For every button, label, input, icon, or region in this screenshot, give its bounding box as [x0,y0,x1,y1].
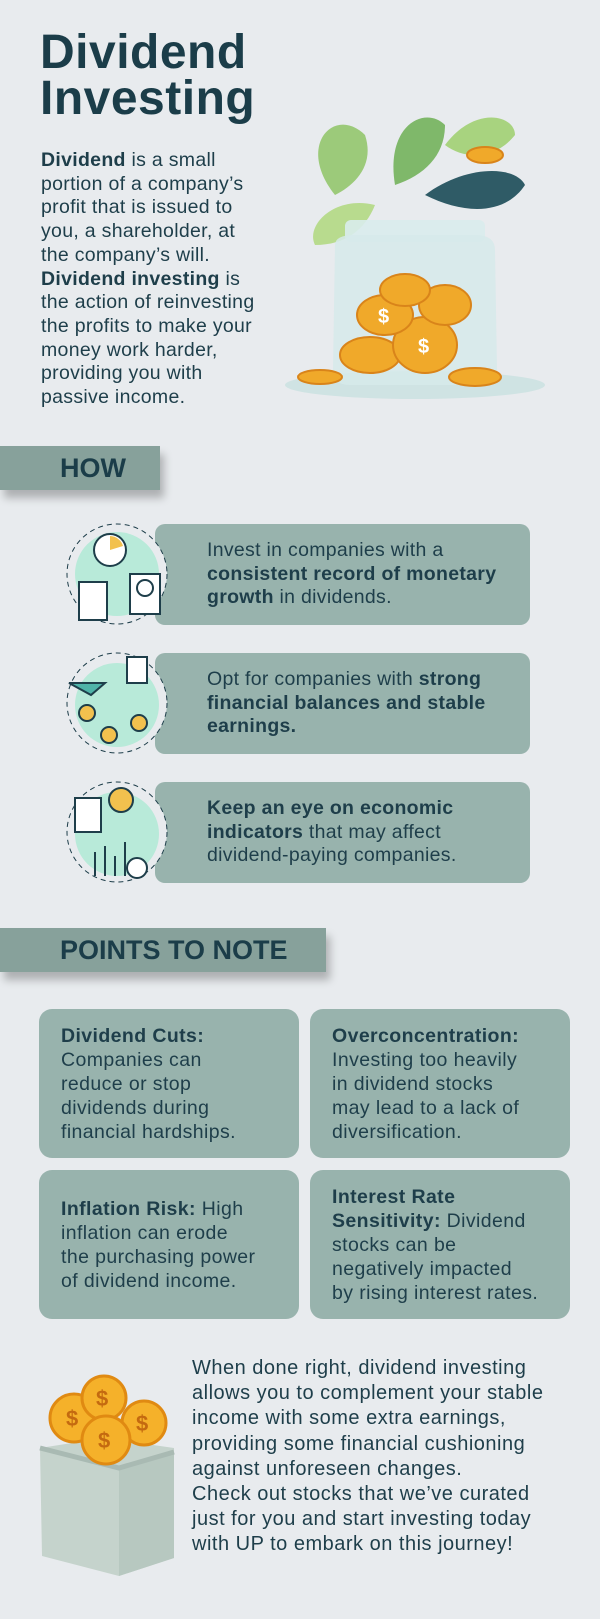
note: overconcentration [310,1009,570,1158]
icon 2 [66,652,168,754]
note: interest rate sensitivity: negatively impacted [332,1258,512,1280]
note: dividend cuts: reduce or stop [61,1072,191,1094]
intro text: providing you with [41,362,202,384]
note: inflation risk: of dividend income. [61,1270,237,1292]
illustration: money jar with plant [285,118,545,399]
banner: POINTS TO NOTE [0,928,326,972]
outro text: income with some extra earnings, [192,1407,506,1429]
intro text: you, a shareholder, at [41,220,235,242]
title [40,26,255,125]
note: interest rate sensitivity: stocks can be [332,1234,456,1256]
icon 3 [66,782,168,882]
illustration: money jar with plant: $ [418,336,429,358]
intro text: Dividend investing is [41,268,240,290]
card 1: consistent record of monetary [207,563,496,585]
intro text: passive income. [41,386,185,408]
card 1: Invest in companies with a [207,539,444,561]
title: Investing [40,72,255,125]
note: overconcentration: Overconcentration: [332,1024,519,1046]
outro text: just for you and start investing today [192,1508,531,1530]
note: interest rate sensitivity: Interest Rate [332,1186,455,1208]
intro text: profit that is issued to [41,196,232,218]
card 3: indicators that may affect [207,821,441,843]
outro text: allows you to complement your stable [192,1382,544,1404]
outro text: providing some financial cushioning [192,1433,525,1455]
note: dividend cuts [39,1009,299,1158]
icon: safe box with coins: $ [96,1386,108,1411]
note: inflation risk: inflation can erode [61,1222,228,1244]
card 1: growth in dividends. [207,586,392,608]
banner: POINTS TO NOTE: POINTS TO NOTE [60,935,288,965]
note: overconcentration: diversification. [332,1120,462,1142]
note: overconcentration: may lead to a lack of [332,1096,519,1118]
note: dividend cuts: Companies can [61,1048,202,1070]
outro text: Check out stocks that we’ve curated [192,1483,530,1505]
outro text [192,1357,544,1555]
note: dividend cuts: financial hardships. [61,1120,236,1142]
title: Dividend [40,26,247,79]
card 2: earnings. [207,715,296,737]
note: interest rate sensitivity: Sensitivity: Dividend [332,1210,526,1232]
note: interest rate sensitivity: by rising interest rates. [332,1282,538,1304]
card 2 [155,653,530,754]
card 2: Opt for companies with strong [207,668,481,690]
banner: HOW [0,446,160,490]
card 2: financial balances and stable [207,692,486,714]
intro text: the action of reinvesting [41,291,254,313]
card 3 [155,782,530,883]
icon: safe box with coins: $ [66,1406,78,1431]
intro text: the company’s will. [41,244,210,266]
note: overconcentration: Investing too heavily [332,1048,517,1070]
card 1 [155,524,530,625]
icon 1 [66,524,168,624]
intro text: the profits to make your [41,315,252,337]
icon: safe box with coins: $ [98,1428,110,1453]
intro text: portion of a company’s [41,173,243,195]
illustration: money jar with plant: $ [378,306,389,328]
intro text: money work harder, [41,339,218,361]
note: inflation risk [39,1170,299,1319]
note: dividend cuts: Dividend Cuts: [61,1024,204,1046]
icon: safe box with coins: $ [136,1411,148,1436]
note: dividend cuts: dividends during [61,1096,209,1118]
outro text: against unforeseen changes. [192,1458,462,1480]
banner: HOW: HOW [60,453,126,483]
icon: safe box with coins [40,1374,175,1576]
outro text: with UP to embark on this journey! [192,1533,513,1555]
intro text: Dividend is a small [41,149,216,171]
intro text [41,149,254,408]
note: interest rate sensitivity [310,1170,570,1319]
note: inflation risk: Inflation Risk: High [61,1198,243,1220]
note: inflation risk: the purchasing power [61,1246,255,1268]
note: overconcentration: in dividend stocks [332,1072,493,1094]
card 3: dividend-paying companies. [207,844,457,866]
outro text: When done right, dividend investing [192,1357,526,1379]
card 3: Keep an eye on economic [207,797,453,819]
